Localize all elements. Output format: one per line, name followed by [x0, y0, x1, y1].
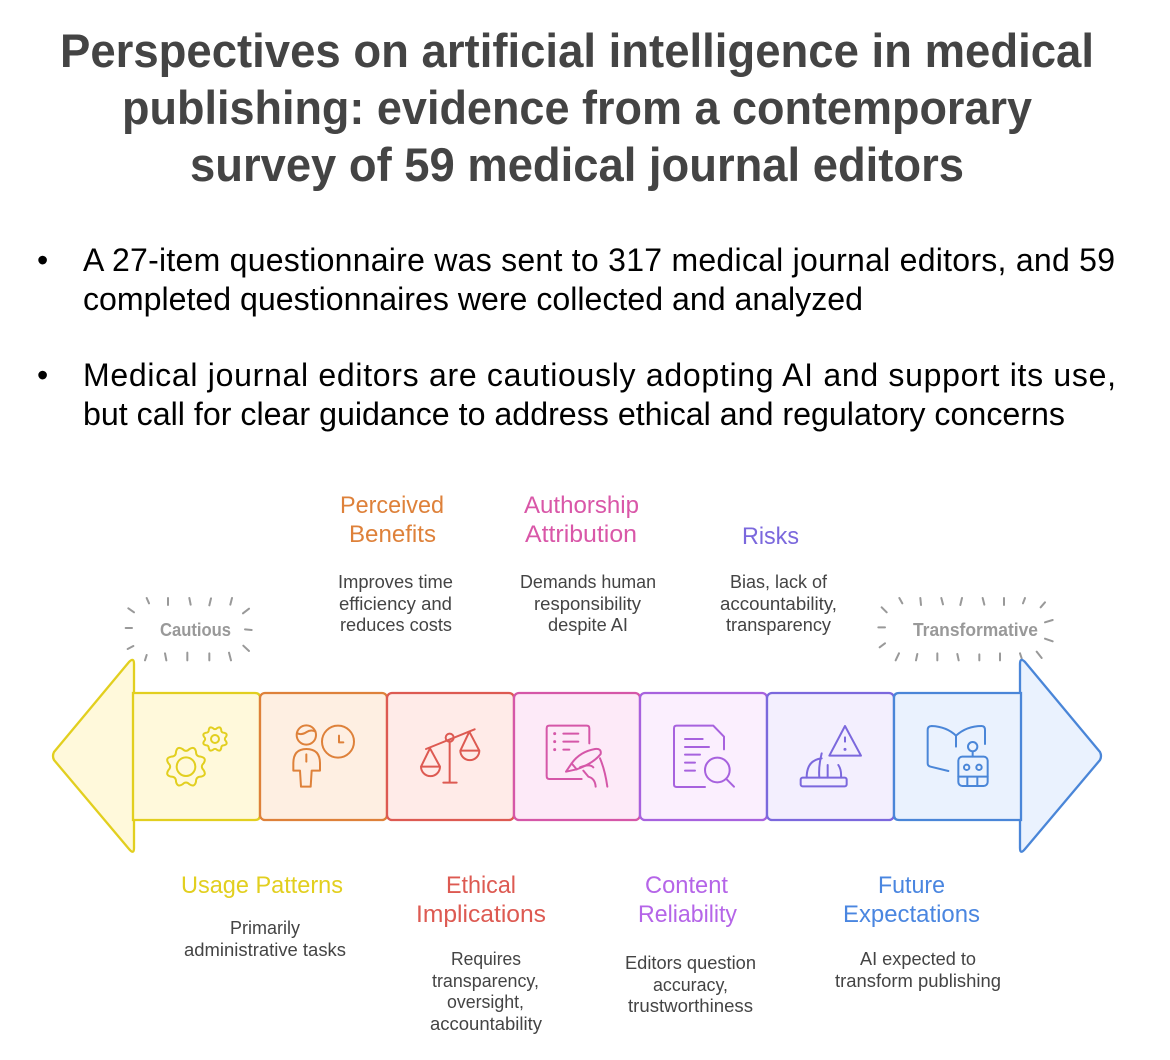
top label: Risks: Risks [742, 523, 799, 550]
bottom label: Ethical Implications [416, 872, 546, 928]
description: Usage Patterns: Primarily [230, 918, 300, 938]
icon: book and robot [928, 726, 988, 786]
top label: Perceived Benefits: Perceived [340, 492, 444, 519]
callout: Transformative: Transformative [913, 620, 1038, 640]
callout: Cautious [126, 598, 252, 660]
description: Risks: accountability, [720, 594, 837, 614]
bullet: cautious adoption: • [37, 357, 48, 393]
segment: Risks [767, 693, 894, 820]
segment: Perceived Benefits [260, 693, 387, 820]
top label: Authorship Attribution [524, 492, 639, 548]
description: Usage Patterns: administrative tasks [184, 940, 346, 960]
description: Ethical Implications: accountability [430, 1014, 542, 1034]
description: Ethical Implications: Requires [451, 949, 521, 969]
bottom label: Future Expectations [843, 872, 980, 928]
icon: person and clock [293, 725, 354, 787]
description: Future Expectations: AI expected to [860, 949, 976, 969]
description: Ethical Implications: transparency, [432, 971, 539, 991]
top label: Authorship Attribution: Authorship [524, 492, 639, 519]
bullet: cautious adoption: Medical journal editors are cautiously adopting AI and support its use, [83, 357, 1116, 393]
icon: scales [421, 729, 479, 783]
description: Perceived Benefits: reduces costs [340, 615, 452, 635]
description: Content Reliability: trustworthiness [628, 996, 753, 1016]
description: Future Expectations [835, 949, 1001, 991]
icon: document with writing hand [547, 726, 607, 787]
top label: Perceived Benefits: Benefits [349, 521, 436, 548]
description: Perceived Benefits: efficiency and [339, 594, 452, 614]
callout: Transformative [878, 598, 1053, 660]
title: Perspectives on artificial intelligence in medical [60, 24, 1094, 77]
segment: Future Expectations [894, 693, 1021, 820]
left arrowhead [53, 660, 134, 852]
bullet: questionnaire: A 27-item questionnaire was sent to 317 medical journal editors, and 59 [83, 242, 1115, 278]
description: Content Reliability [625, 953, 756, 1016]
bullet: questionnaire: • [37, 242, 48, 278]
title: survey of 59 medical journal editors [190, 138, 964, 191]
bullet: questionnaire [37, 242, 1115, 317]
description: Perceived Benefits: Improves time [338, 572, 453, 592]
description: Risks: Bias, lack of [730, 572, 828, 592]
bullet: questionnaire: completed questionnaires were collected and analyzed [83, 281, 863, 317]
segment: Content Reliability [640, 693, 767, 820]
description: Ethical Implications: oversight, [447, 992, 524, 1012]
icon: gears [167, 727, 227, 785]
description: Usage Patterns [184, 918, 346, 960]
title: publishing: evidence from a contemporary [122, 81, 1032, 134]
bottom label: Future Expectations: Expectations [843, 901, 980, 928]
description: Risks: transparency [726, 615, 831, 635]
description: Ethical Implications [430, 949, 542, 1034]
bullet: cautious adoption: but call for clear guidance to address ethical and regulatory concerns [83, 396, 1065, 432]
bottom label: Content Reliability: Reliability [638, 901, 737, 928]
bottom label: Content Reliability [638, 872, 737, 928]
description: Content Reliability: accuracy, [653, 975, 728, 995]
icon: warning and scale [801, 726, 861, 786]
bottom label: Ethical Implications: Implications [416, 901, 546, 928]
description: Perceived Benefits [338, 572, 453, 635]
bottom label: Ethical Implications: Ethical [446, 872, 516, 899]
segment: Authorship Attribution [514, 693, 640, 820]
right arrowhead [1020, 660, 1101, 852]
top label: Perceived Benefits [340, 492, 444, 548]
top label: Authorship Attribution: Attribution [525, 521, 637, 548]
icon: document with magnifier [674, 726, 734, 787]
callout: Cautious: Cautious [160, 620, 231, 640]
bullet: cautious adoption [37, 357, 1116, 432]
bottom label: Future Expectations: Future [878, 872, 945, 899]
description: Authorship Attribution: Demands human [520, 572, 656, 592]
description: Content Reliability: Editors question [625, 953, 756, 973]
description: Future Expectations: transform publishing [835, 971, 1001, 991]
title [60, 24, 1094, 191]
segment: Ethical Implications [387, 693, 514, 820]
bottom label: Content Reliability: Content [645, 872, 728, 899]
description: Risks [720, 572, 837, 635]
description: Authorship Attribution: despite AI [548, 615, 628, 635]
bottom label: Usage Patterns: Usage Patterns [181, 872, 343, 899]
description: Authorship Attribution [520, 572, 656, 635]
description: Authorship Attribution: responsibility [534, 594, 641, 614]
segment: Usage Patterns [133, 693, 260, 820]
